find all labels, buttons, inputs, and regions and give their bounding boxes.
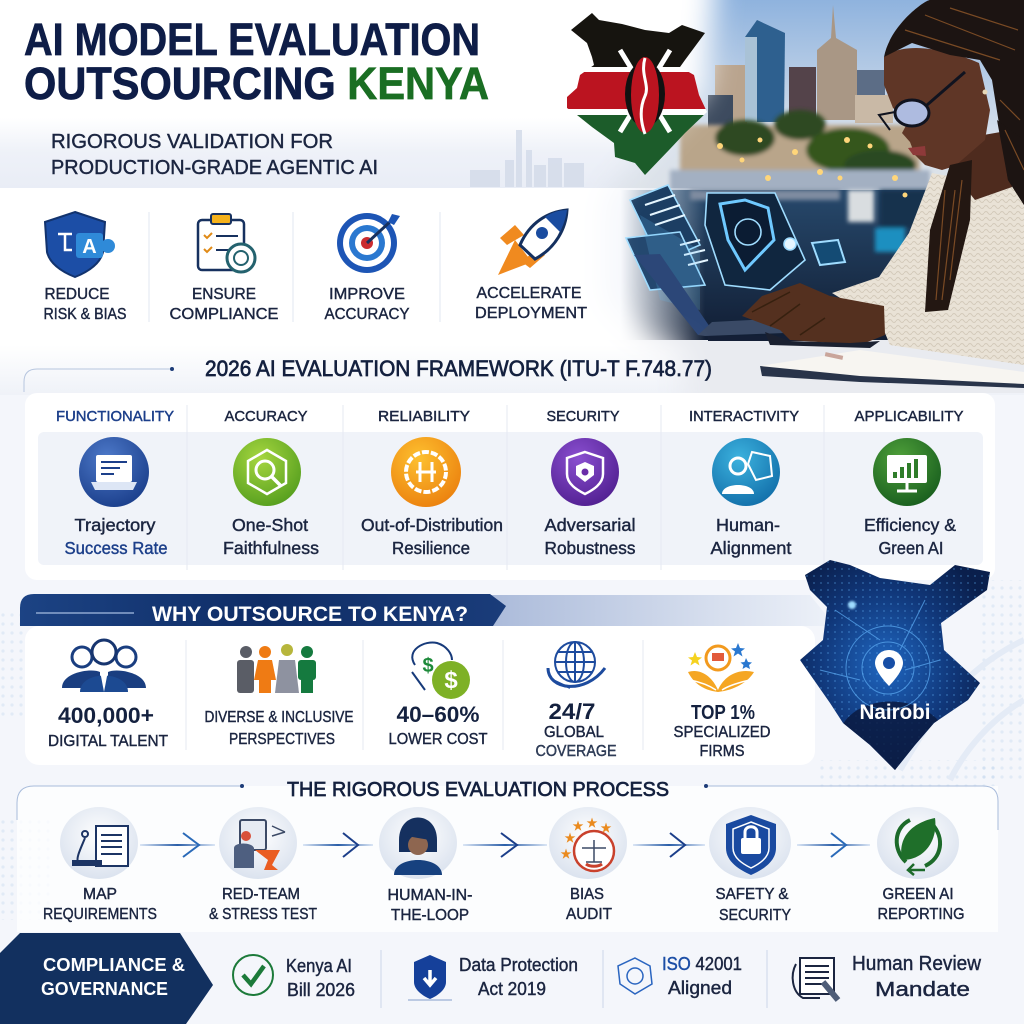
skyline buildings [708,5,893,130]
step: red-team and stress test [209,807,317,923]
benefit: ensure compliance: COMPLIANCE [170,306,278,323]
pillar: security: Adversarial [544,515,636,535]
step: bias audit: ★ [587,816,598,830]
subtitle [51,131,378,179]
compliance: human review mandate [793,953,982,1001]
step: safety and security: SECURITY [719,907,791,924]
face [884,48,990,170]
bokeh lights [717,137,908,198]
step: bias audit [549,807,627,923]
reason: lower cost: LOWER COST [388,731,488,748]
panel: why outsource [25,626,815,765]
hologram interface [626,185,845,310]
notebook [760,350,1024,388]
pillar: interactivity: INTERACTIVITY [689,408,799,425]
compliance: Kenya AI Bill: Bill 2026 [287,980,355,1000]
reason: diverse perspectives: PERSPECTIVES [229,731,335,748]
Nairobi digital map [800,560,990,770]
compliance banner: COMPLIANCE & [43,955,185,975]
step: green AI reporting: GREEN AI [882,886,954,903]
pillar: reliability: Out-of-Distribution [361,515,503,535]
Nairobi digital map: Nairobi [860,701,930,724]
reason: diverse perspectives [204,644,354,748]
dividers [149,212,440,322]
compliance: human review mandate: Human Review [852,953,982,975]
subtitle: PRODUCTION-GRADE AGENTIC AI [51,157,378,179]
benefit: accelerate deployment [475,210,587,322]
title: OUTSOURCING KENYA [24,58,489,109]
pillar: interactivity: Human- [716,515,780,535]
benefit: improve accuracy: IMPROVE [329,286,405,303]
compliance: ISO 42001 [618,954,742,998]
icon: stars and laurel [688,643,754,692]
reason: global coverage [536,642,616,760]
pillar: security: Robustness [544,538,636,558]
faint skyline behind subtitle [470,130,584,187]
eyeglasses [879,72,965,130]
icon: green check circle [233,955,273,995]
hands [742,283,885,345]
process heading: THE RIGOROUS EVALUATION PROCESS [287,779,669,801]
benefit: ensure compliance [170,214,278,323]
benefit: accelerate deployment: ACCELERATE [476,285,582,302]
compliance: ISO 42001: ISO 42001 [662,954,742,974]
dividers [381,950,767,1008]
compliance: Data Protection Act: Act 2019 [478,979,546,999]
pillar: interactivity: Alignment [710,538,792,558]
step: safety and security [709,807,791,924]
step: human in the loop: HUMAN-IN- [388,887,472,904]
reason: top specialized firms: TOP 1% [691,702,755,724]
step arrows [140,833,870,857]
pillar: accuracy: Faithfulness [223,538,319,558]
compliance banner: GOVERNANCE [41,979,168,999]
step: bias audit: ★ [565,831,576,845]
icon: Kenya flag map [567,13,707,175]
pillar: applicability: APPLICABILITY [854,408,964,425]
pillar: functionality: Trajectory [74,515,156,535]
braids [925,160,972,312]
icon: document with pen [793,958,838,1000]
compliance: Data Protection Act [408,955,578,1000]
hair [884,0,1024,205]
panel: evaluation process [17,779,998,932]
table [637,340,1024,392]
compliance banner [0,933,213,1024]
reason: digital talent [48,640,168,750]
step: bias audit: ★ [573,819,584,833]
step: map requirements [43,807,157,923]
reason: top specialized firms: FIRMS [700,743,744,760]
compliance: Data Protection Act: Data Protection [459,955,578,975]
compliance: Kenya AI Bill [233,955,355,1000]
compliance: ISO 42001: Aligned [668,978,732,998]
icon: group of people [62,640,146,692]
icon: rocket [498,210,567,275]
header soft band [0,118,640,188]
benefit: reduce risk and bias: REDUCE [44,286,110,303]
compliance: human review mandate: Mandate [875,979,970,1001]
pillar: functionality: Success Rate [64,538,168,558]
framework heading: 2026 AI EVALUATION FRAMEWORK (ITU-T F.748.77) [205,356,712,381]
step: human in the loop: THE-LOOP [391,907,469,924]
decorative dots and curves [0,610,1000,920]
step: bias audit: ★ [601,821,612,835]
title [24,14,489,109]
step: red-team and stress test: & STRESS TEST [209,906,317,923]
step: bias audit: BIAS [570,886,604,903]
benefit: accelerate deployment: DEPLOYMENT [475,305,587,322]
trees and lit town [670,110,930,194]
reason: top specialized firms [674,643,770,760]
pillar: accuracy: One-Shot [232,515,308,535]
benefit: ensure compliance: ENSURE [192,286,256,303]
subtitle: RIGOROUS VALIDATION FOR [51,131,333,153]
step: map requirements: REQUIREMENTS [43,906,157,923]
icon: shield with check [408,955,452,1000]
icon: globe with orbit [548,642,605,688]
neck [955,130,1012,200]
pillar: applicability: Efficiency & [864,515,956,535]
framework heading [24,356,712,392]
step: map requirements: MAP [83,886,117,903]
hero photo: Nairobi skyline and analyst at laptop [620,0,1024,392]
reason: global coverage: 24/7 [548,699,596,724]
reason: digital talent: 400,000+ [58,703,154,728]
pillar: functionality: FUNCTIONALITY [56,408,174,425]
benefit: improve accuracy [324,213,410,323]
reason: lower cost: 40–60% [396,702,480,727]
pillar: reliability: RELIABILITY [378,408,470,425]
step: green AI reporting: REPORTING [878,906,964,923]
step: bias audit: ★ [561,847,572,861]
pillar: security [544,408,636,558]
pillar: reliability [361,408,503,558]
pillar: interactivity [689,408,799,558]
pillar: applicability [854,408,964,558]
step: green AI reporting [877,807,964,923]
icon: dollar coins: $ [444,667,458,694]
blurred street lower band [624,190,926,340]
step: human in the loop [379,807,472,924]
step: bias audit: AUDIT [566,906,612,923]
reason: digital talent: DIGITAL TALENT [48,733,168,750]
compliance: Kenya AI Bill: Kenya AI [286,956,352,976]
pillar: security: SECURITY [546,408,620,425]
reason: global coverage: GLOBAL [544,724,604,741]
why outsource banner [20,594,835,626]
icon: target with arrow [337,213,400,273]
benefit: improve accuracy: ACCURACY [324,306,410,323]
pillar: functionality [56,408,174,558]
icon: ISO seal [618,958,652,994]
icon: clipboard checklist [198,214,255,272]
step: red-team and stress test: RED-TEAM [222,886,300,903]
reason: global coverage: COVERAGE [536,743,616,760]
benefit: reduce risk and bias: RISK & BIAS [44,306,126,323]
icon: shield with puzzle: A [82,236,97,258]
sweater [832,173,1024,365]
title: AI MODEL EVALUATION [24,14,480,65]
reason: top specialized firms: SPECIALIZED [674,724,770,741]
reason: lower cost [388,642,488,748]
pillar: accuracy: ACCURACY [224,408,308,425]
icon: diverse people [237,644,316,693]
laptop [634,254,804,341]
icon: dollar coins [412,642,470,699]
pillar: reliability: Resilience [392,538,470,558]
icon: dollar coins: $ [422,655,434,677]
why outsource banner: WHY OUTSOURCE TO KENYA? [152,603,468,626]
reason: diverse perspectives: DIVERSE & INCLUSIVE [204,709,354,726]
step: safety and security: SAFETY & [716,886,789,903]
pillar: applicability: Green AI [878,538,944,558]
panel: evaluation framework [25,393,995,580]
pillar: accuracy [223,408,319,558]
benefit: reduce risk and bias [44,212,126,323]
